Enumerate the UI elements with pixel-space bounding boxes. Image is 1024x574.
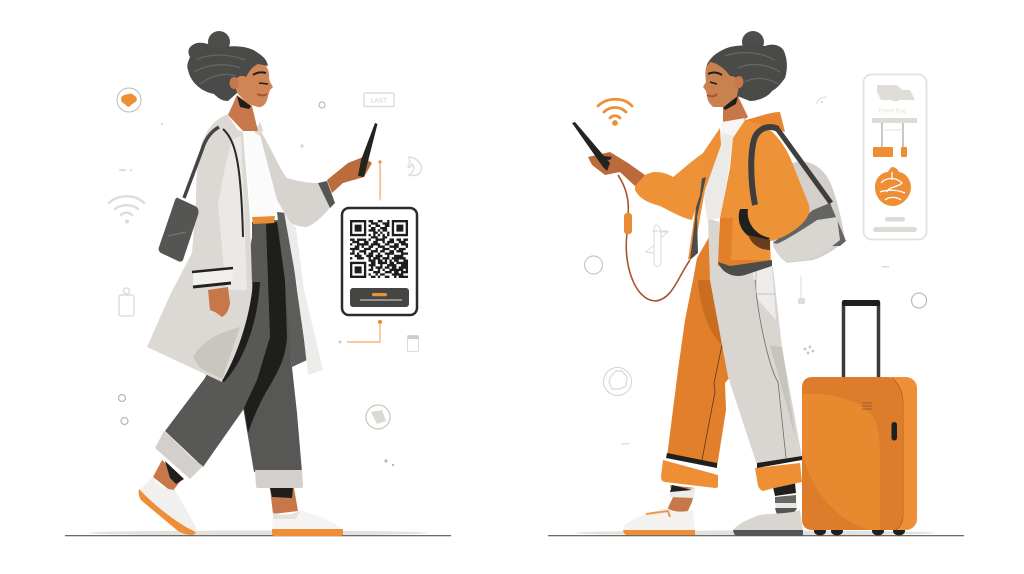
icon: document bbox=[408, 336, 418, 352]
right neck shadow bbox=[723, 96, 738, 110]
ground: right bbox=[548, 530, 964, 536]
decorative dots left upper bbox=[119, 123, 304, 171]
right hair bbox=[707, 31, 787, 101]
icon: luggage tag bbox=[119, 288, 134, 316]
left ankles bbox=[153, 460, 298, 514]
left belt bbox=[252, 216, 275, 224]
icon: hexagon badge bbox=[604, 368, 632, 396]
right neck bbox=[723, 94, 748, 128]
right jacket body bbox=[718, 120, 810, 266]
left raised forearm and hand bbox=[327, 157, 372, 193]
panel: rack bbox=[872, 118, 917, 147]
right orange trouser leg bbox=[667, 232, 730, 467]
left phone bbox=[358, 123, 378, 177]
left trouser cuffs bbox=[155, 431, 303, 488]
right jacket inner lining bbox=[690, 177, 706, 260]
panel: top shape bbox=[877, 85, 915, 101]
left ear bbox=[230, 77, 238, 89]
left trousers dark fold bbox=[244, 222, 287, 433]
left shoulder bag bbox=[159, 127, 219, 262]
connector below QR card bbox=[338, 320, 382, 344]
right cord bbox=[618, 175, 690, 301]
icon: small pin bbox=[798, 276, 805, 304]
figure: left woman bbox=[139, 31, 378, 536]
left trousers back leg bbox=[243, 220, 302, 472]
icon: small arc bbox=[816, 97, 827, 104]
icon: ticket label: LAST bbox=[371, 98, 387, 104]
right cord clip bbox=[624, 213, 632, 234]
suitcase grip bbox=[892, 422, 897, 440]
right jacket left panel bbox=[688, 128, 721, 260]
icon: map badge bbox=[366, 405, 390, 429]
left sleeve bbox=[258, 127, 335, 227]
left trousers front leg bbox=[165, 222, 272, 467]
right hood bbox=[745, 112, 785, 137]
icon: ring right bbox=[912, 293, 926, 308]
icon: small ring bbox=[319, 102, 325, 108]
suitcase wheels bbox=[814, 526, 905, 536]
icon: faint plane bbox=[646, 225, 668, 266]
decorative dots left lower bbox=[384, 459, 394, 466]
suitcase handle bbox=[842, 300, 880, 377]
panel: faint caption: Travel Bag bbox=[878, 108, 906, 114]
panel: orange bags bbox=[873, 147, 907, 157]
right white trouser leg bbox=[708, 218, 802, 465]
icon: phone mockup panel bbox=[864, 74, 926, 240]
icon: orange wifi bbox=[598, 99, 632, 124]
right grey backpack bbox=[770, 161, 846, 263]
right raised forearm and hand bbox=[588, 152, 645, 186]
left neck shadow bbox=[237, 96, 251, 109]
right trouser cuffs bbox=[661, 453, 802, 491]
icon: small ring bbox=[584, 256, 602, 274]
QR card bbox=[342, 208, 417, 315]
icon: grey wifi bbox=[109, 196, 144, 223]
suitcase body bbox=[802, 377, 917, 530]
right jacket sleeve bbox=[635, 152, 705, 220]
QR card footer bbox=[350, 288, 409, 307]
icon: ticket label bbox=[364, 93, 394, 106]
left coat bbox=[147, 114, 263, 382]
QR code bbox=[350, 221, 408, 277]
icon: ring one bbox=[118, 394, 126, 402]
right trouser seam bbox=[702, 345, 722, 460]
icon: orange badge bbox=[117, 88, 141, 112]
suitcase light panel bbox=[802, 394, 880, 530]
figure: right woman bbox=[572, 31, 846, 536]
right face bbox=[703, 60, 745, 107]
right facial features bbox=[707, 73, 722, 96]
ground: left bbox=[65, 530, 451, 536]
left coat front flap bbox=[284, 212, 323, 375]
left shirt bbox=[243, 130, 287, 218]
right ankles bbox=[667, 483, 797, 515]
icon: ear glyph bbox=[408, 157, 421, 176]
connector above QR card bbox=[378, 160, 382, 200]
left coat lining bbox=[277, 212, 307, 367]
right bag strap bbox=[751, 127, 831, 205]
right shoes bbox=[623, 508, 803, 536]
left shoes bbox=[139, 477, 343, 536]
left coat cuff bands bbox=[192, 268, 233, 288]
left facial features bbox=[253, 72, 268, 96]
left hand, lower bbox=[208, 287, 230, 317]
panel: orange round pattern bbox=[875, 167, 911, 206]
right shirt bbox=[703, 118, 745, 220]
panel: buttons bbox=[873, 217, 917, 232]
right ear bbox=[734, 76, 744, 88]
right orange trouser shadow bbox=[698, 280, 722, 345]
right collar bbox=[722, 118, 745, 136]
suitcase seam bbox=[892, 378, 903, 530]
suitcase tag bbox=[862, 403, 872, 409]
right jacket hem bbox=[718, 260, 772, 276]
right phone bbox=[572, 122, 612, 171]
left hair bbox=[187, 31, 268, 101]
left face bbox=[236, 62, 273, 107]
right white trouser highlight and seam bbox=[752, 267, 796, 458]
suitcase front panel bbox=[802, 377, 902, 530]
right pocket hand opening bbox=[739, 209, 770, 250]
icon: ring two bbox=[121, 418, 128, 424]
decorative dots right bbox=[621, 266, 889, 444]
left neck bbox=[228, 95, 258, 131]
suitcase bbox=[802, 300, 917, 536]
